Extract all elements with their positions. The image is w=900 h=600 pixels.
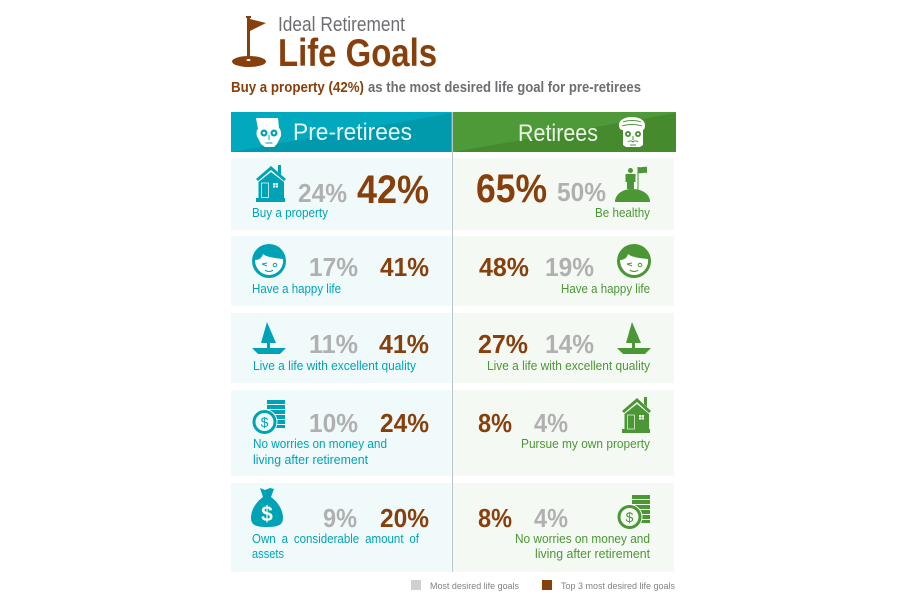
value: 11%: 11%	[309, 329, 358, 359]
label	[515, 531, 650, 561]
title: Ideal Retirement	[278, 14, 405, 36]
label: Be healthy	[595, 205, 650, 220]
label: No worries on money and	[515, 531, 650, 546]
icon: coins: $	[626, 509, 634, 525]
panel: pre-retirees header	[231, 112, 452, 152]
icon: golf flag	[232, 16, 266, 67]
icon: house	[622, 397, 651, 433]
value: 41%: 41%	[379, 329, 429, 359]
legend: Top 3 most desired life goals	[561, 581, 675, 592]
heading: pre-retirees: Pre-retirees	[293, 119, 412, 146]
label: Live a life with excellent quality	[253, 358, 416, 373]
label: living after retirement	[535, 546, 650, 561]
heading: retirees: Retirees	[518, 120, 598, 147]
subtitle	[231, 80, 641, 96]
value: 8%: 8%	[478, 408, 512, 438]
icon: sailboat	[252, 322, 286, 354]
panel: pre-retirees happy life	[231, 236, 451, 306]
panel: retirees no money worries	[453, 483, 674, 572]
label: Pursue my own property	[521, 436, 650, 451]
panel: retirees own property	[453, 390, 674, 476]
icon: coins: $	[261, 414, 269, 430]
title	[278, 14, 437, 75]
value: 24%: 24%	[380, 408, 429, 438]
value: 41%: 41%	[380, 252, 429, 282]
value: 8%: 8%	[478, 503, 512, 533]
value: 4%: 4%	[534, 408, 568, 438]
legend	[411, 580, 675, 592]
icon: money bag	[251, 488, 283, 527]
label: assets	[252, 546, 284, 561]
value: 20%: 20%	[380, 503, 429, 533]
subtitle: Buy a property (42%)	[231, 80, 364, 96]
panel: retirees happy life	[453, 236, 674, 306]
label: Live a life with excellent quality	[487, 358, 650, 373]
label: Own a considerable amount of	[252, 531, 419, 546]
icon: house	[256, 165, 286, 202]
label: Have a happy life	[252, 281, 341, 296]
panel: retirees header	[453, 112, 676, 152]
centre divider line	[452, 112, 453, 572]
value: 42%: 42%	[357, 168, 429, 212]
icon: coins	[616, 495, 650, 530]
label: Have a happy life	[561, 281, 650, 296]
label: No worries on money and	[253, 436, 387, 451]
legend: Most desired life goals	[430, 581, 519, 592]
title: Life Goals	[278, 32, 437, 75]
icon: money bag: $	[261, 503, 273, 526]
value: 24%: 24%	[298, 178, 347, 208]
label	[252, 531, 419, 561]
value: 19%: 19%	[545, 252, 594, 282]
panel: pre-retirees considerable assets	[231, 483, 451, 572]
label: Buy a property	[252, 205, 328, 220]
icon: retiree face	[619, 117, 645, 147]
value: 50%: 50%	[557, 177, 606, 207]
value: 10%: 10%	[309, 408, 358, 438]
panel: retirees be healthy	[453, 158, 674, 230]
panel: pre-retirees excellent quality	[231, 313, 451, 383]
label: living after retirement	[253, 452, 368, 467]
value: 17%: 17%	[309, 252, 358, 282]
icon: pre-retiree face	[256, 118, 281, 147]
subtitle: as the most desired life goal for pre-retirees	[368, 80, 641, 96]
value: 65%: 65%	[476, 167, 547, 211]
icon: person on hill with flag	[615, 167, 650, 202]
value: 48%: 48%	[479, 252, 529, 282]
value: 14%: 14%	[545, 329, 594, 359]
panel: retirees excellent quality	[453, 313, 674, 383]
panel: pre-retirees buy a property	[231, 158, 451, 230]
label	[253, 436, 387, 467]
value: 9%: 9%	[323, 503, 357, 533]
panel: pre-retirees no money worries	[231, 390, 451, 476]
value: 27%: 27%	[478, 329, 528, 359]
icon: happy face	[617, 244, 651, 278]
icon: sailboat	[617, 322, 651, 354]
icon: happy face	[252, 244, 286, 278]
value: 4%: 4%	[534, 503, 568, 533]
icon: coins	[252, 400, 285, 435]
